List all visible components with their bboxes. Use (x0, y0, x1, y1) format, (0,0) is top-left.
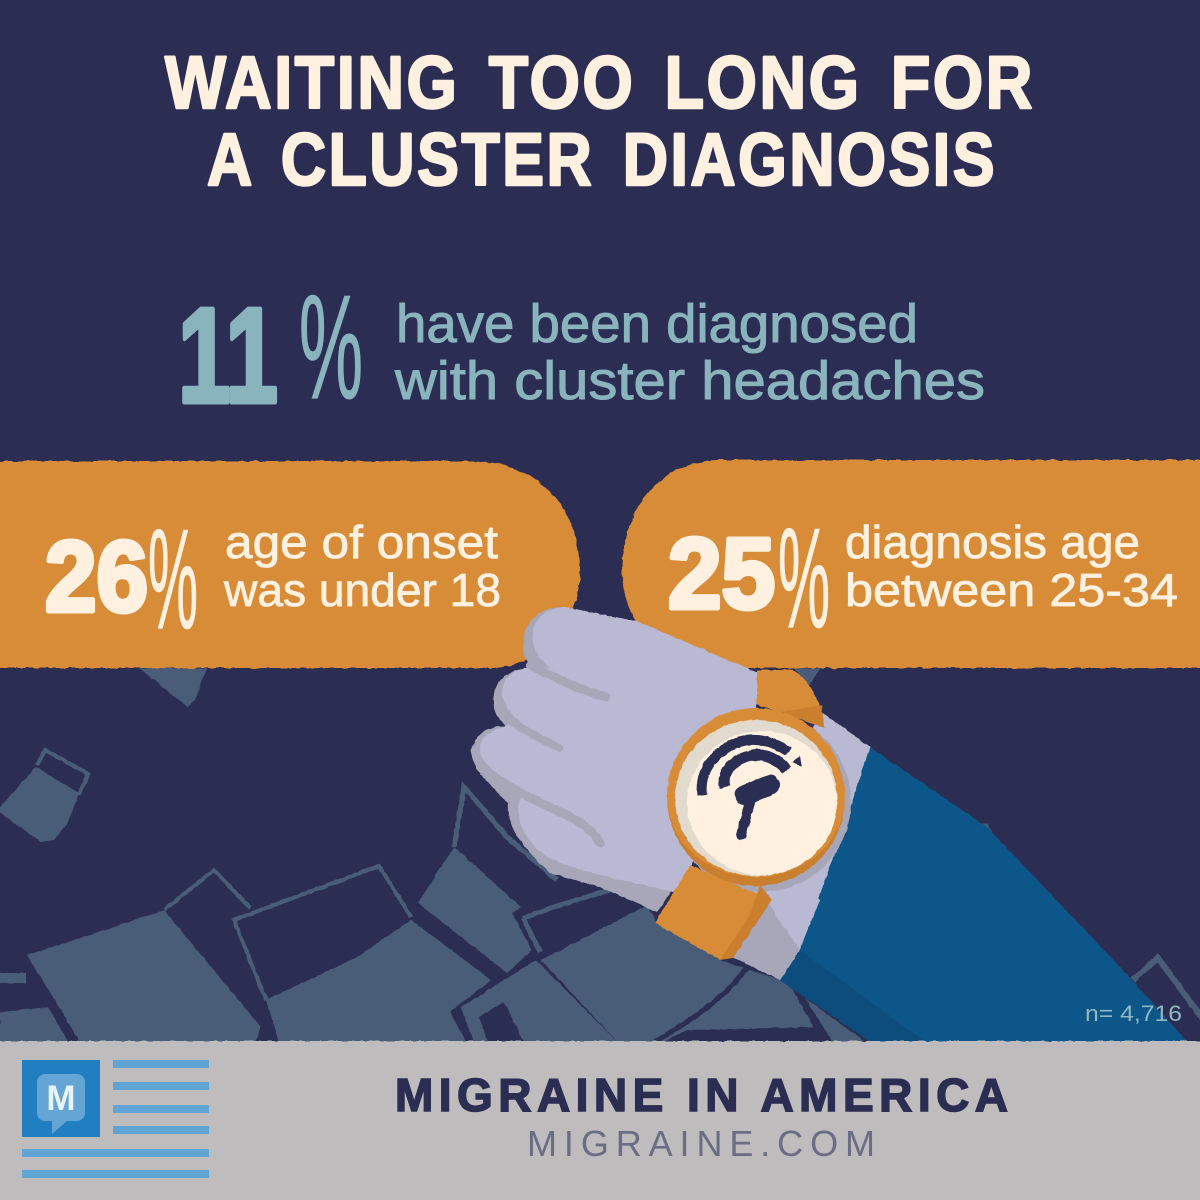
banner: age of onset: was under 18 (223, 564, 501, 616)
logo: flag with speech bubble: M (46, 1079, 76, 1118)
stat: 11 percent diagnosed: have been diagnosed (396, 294, 918, 354)
footer bar: MIGRAINE IN AMERICA (395, 1069, 1008, 1121)
hand (472, 607, 757, 912)
banner: age of onset: % (148, 500, 198, 659)
icon: question mark on dial (702, 740, 802, 835)
banner: diagnosis age: % (778, 499, 830, 658)
banner: diagnosis age: diagnosis age (845, 516, 1140, 568)
title: A CLUSTER DIAGNOSIS (207, 118, 997, 201)
shirt cuff (671, 712, 870, 980)
sleeve (780, 747, 1190, 1045)
footer bar: MIGRAINE.COM (527, 1123, 875, 1164)
stat: 11 percent diagnosed (178, 265, 985, 431)
title: WAITING TOO LONG FOR (165, 41, 1035, 124)
logo: flag with speech bubble (22, 1060, 209, 1178)
scattered papers illustration (0, 668, 1200, 1045)
watch case (667, 708, 845, 886)
banner: diagnosis age (622, 460, 1200, 668)
stat: 11 percent diagnosed: % (299, 265, 363, 430)
footer bar (0, 1041, 1200, 1200)
title (165, 41, 1035, 201)
banner: age of onset: age of onset (225, 516, 498, 568)
stat: 11 percent diagnosed: with cluster headaches (394, 351, 985, 411)
sample size note: n= 4,716 (1085, 1001, 1182, 1026)
banner: diagnosis age: 25 (668, 518, 775, 630)
watch strap (655, 670, 824, 960)
banner: age of onset: 26 (45, 521, 148, 633)
illustration: hand with watch (472, 607, 1190, 1045)
stat: 11 percent diagnosed: 11 (178, 280, 278, 431)
banner: diagnosis age: between 25-34 (845, 564, 1178, 616)
banner: age of onset (0, 461, 580, 668)
